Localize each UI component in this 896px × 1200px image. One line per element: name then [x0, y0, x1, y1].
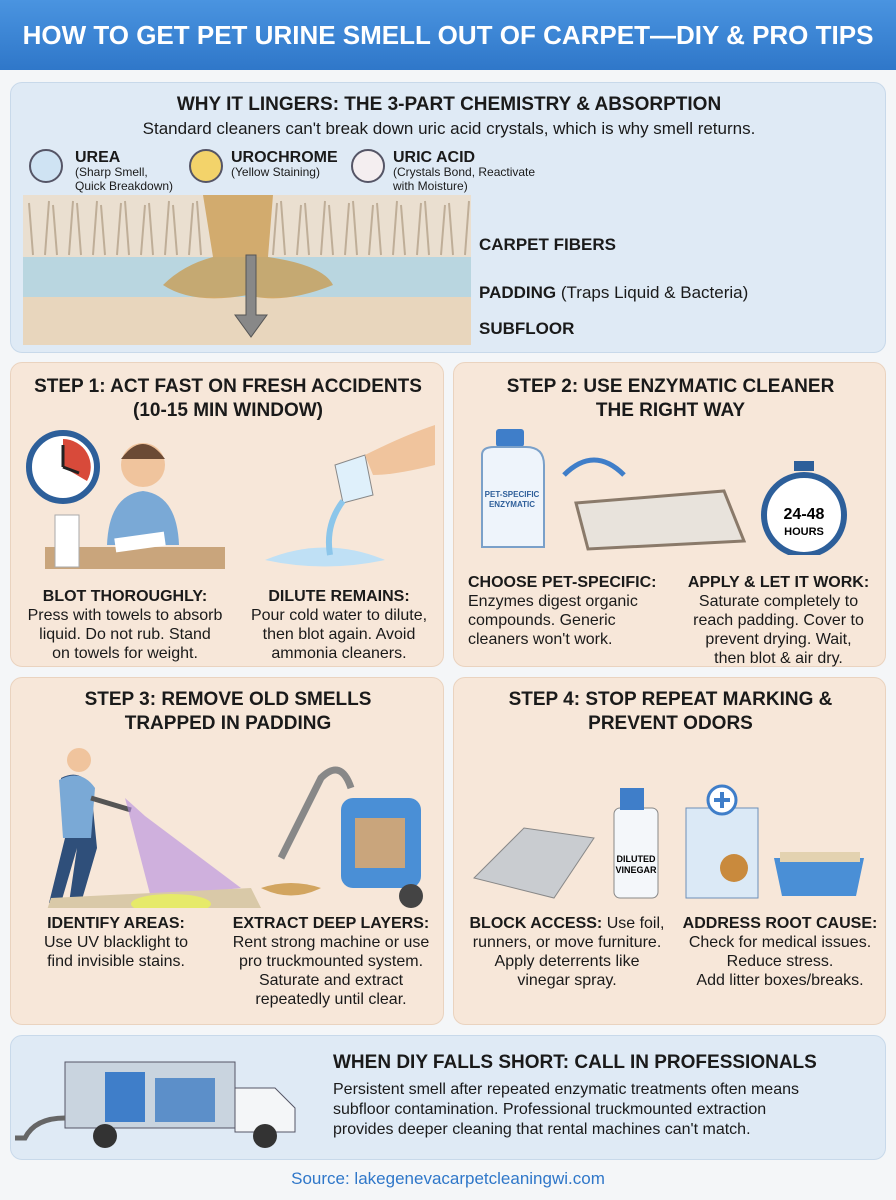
caption: dilute	[251, 588, 427, 662]
caption: blot	[28, 588, 222, 662]
caption: identify: find invisible stains.	[47, 953, 185, 970]
panel: step 3	[10, 677, 444, 1025]
panel: why it lingers: PADDING (Traps Liquid & Bacteria)	[479, 283, 748, 302]
caption: root cause: ADDRESS ROOT CAUSE:	[683, 915, 877, 932]
heading: STEP 2: USE ENZYMATIC CLEANER	[507, 376, 834, 397]
body text: subfloor contamination. Professional truckmounted extraction	[333, 1101, 766, 1118]
caption: apply: reach padding. Cover to	[693, 612, 864, 629]
caption: apply	[688, 574, 869, 667]
chemistry labels: UROCHROME	[231, 149, 338, 166]
illustration: foil, spray, vet, litter	[473, 784, 864, 899]
caption: apply: Saturate completely to	[699, 593, 858, 610]
caption: root cause: Check for medical issues.	[689, 934, 871, 951]
panel: why it lingers	[10, 82, 886, 353]
panel: step 2	[453, 362, 886, 667]
caption: root cause: Add litter boxes/breaks.	[696, 972, 864, 989]
caption: choose: cleaners won't work.	[468, 631, 612, 648]
illustration: foil, spray, vet, litter: DILUTED	[616, 854, 656, 864]
heading: STEP 4: STOP REPEAT MARKING &	[509, 689, 832, 710]
caption: block: Apply deterrents like	[495, 953, 639, 970]
chemistry labels: (Yellow Staining)	[231, 165, 320, 179]
illustration: bottle, mat, timer: 24-48	[784, 506, 825, 523]
heading	[509, 689, 832, 734]
caption: extract	[233, 915, 429, 1008]
chemistry labels: (Crystals Bond, Reactivate	[393, 165, 535, 179]
illustration: bottle, mat, timer	[481, 429, 847, 555]
caption: identify: Use UV blacklight to	[44, 934, 188, 951]
chemistry labels: with Moisture)	[393, 179, 468, 193]
caption: dilute: DILUTE REMAINS:	[268, 588, 410, 605]
caption: apply: prevent drying. Wait,	[705, 631, 852, 648]
heading: TRAPPED IN PADDING	[125, 713, 331, 734]
caption: block	[470, 915, 664, 989]
chemistry labels	[29, 149, 535, 193]
caption: blot: Press with towels to absorb	[28, 607, 222, 624]
caption: extract: EXTRACT DEEP LAYERS:	[233, 915, 429, 932]
caption: block: runners, or move furniture.	[473, 934, 661, 951]
panel: step 1	[10, 362, 444, 667]
heading: WHY IT LINGERS: THE 3-PART CHEMISTRY & ABSORPTION	[177, 94, 721, 115]
heading: THE RIGHT WAY	[596, 400, 745, 421]
carpet cross-section	[23, 195, 471, 345]
caption: block: BLOCK ACCESS: Use foil,	[470, 915, 664, 932]
caption: blot: on towels for weight.	[52, 645, 198, 662]
caption: dilute: ammonia cleaners.	[271, 645, 407, 662]
heading: (10-15 MIN WINDOW)	[133, 400, 323, 421]
title bar: HOW TO GET PET URINE SMELL OUT OF CARPET—DIY & PRO TIPS	[23, 20, 873, 50]
icon: truck	[15, 1062, 296, 1148]
heading	[85, 689, 371, 734]
layer labels: CARPET FIBERS	[479, 235, 616, 254]
source: Source: lakegenevacarpetcleaningwi.com	[291, 1169, 605, 1188]
chemistry labels: Quick Breakdown)	[75, 179, 173, 193]
caption: choose: Enzymes digest organic	[468, 593, 638, 610]
caption: apply: then blot & air dry.	[714, 650, 843, 667]
title bar	[0, 0, 896, 70]
chemistry labels: URIC ACID	[393, 149, 475, 166]
chemistry labels: (Sharp Smell,	[75, 165, 148, 179]
illustration: UV light and extractor	[48, 748, 423, 908]
caption: choose: compounds. Generic	[468, 612, 616, 629]
caption: extract: repeatedly until clear.	[255, 991, 407, 1008]
panel: step 4	[453, 677, 886, 1025]
caption: choose	[468, 574, 656, 648]
heading: STEP 1: ACT FAST ON FRESH ACCIDENTS	[34, 376, 422, 397]
body text: Persistent smell after repeated enzymatic treatments often means	[333, 1081, 799, 1098]
caption: apply: APPLY & LET IT WORK:	[688, 574, 869, 591]
heading: WHEN DIY FALLS SHORT: CALL IN PROFESSIONALS	[333, 1052, 817, 1073]
caption: extract: Saturate and extract	[259, 972, 403, 989]
caption: root cause	[683, 915, 877, 989]
subtitle: Standard cleaners can't break down uric acid crystals, which is why smell returns.	[143, 119, 755, 138]
chemistry labels: UREA	[75, 149, 120, 166]
illustration: bottle, mat, timer: PET-SPECIFIC	[485, 490, 540, 499]
body text: provides deeper cleaning that rental machines can't match.	[333, 1121, 751, 1138]
heading: STEP 3: REMOVE OLD SMELLS	[85, 689, 371, 710]
caption: identify	[44, 915, 188, 970]
heading: PREVENT ODORS	[588, 713, 753, 734]
caption: extract: Rent strong machine or use	[233, 934, 429, 951]
heading	[34, 376, 422, 421]
caption: choose: CHOOSE PET-SPECIFIC:	[468, 574, 656, 591]
caption: dilute: Pour cold water to dilute,	[251, 607, 427, 624]
caption: dilute: then blot again. Avoid	[263, 626, 415, 643]
caption: root cause: Reduce stress.	[727, 953, 833, 970]
illustration: foil, spray, vet, litter: VINEGAR	[615, 865, 657, 875]
caption: extract: pro truckmounted system.	[239, 953, 423, 970]
heading	[507, 376, 834, 421]
panel: professionals	[10, 1035, 886, 1160]
panel: why it lingers: SUBFLOOR	[479, 319, 574, 338]
caption: identify: IDENTIFY AREAS:	[47, 915, 185, 932]
caption: blot: BLOT THOROUGHLY:	[43, 588, 207, 605]
illustration: clock and person blotting	[26, 425, 435, 569]
caption: block: vinegar spray.	[517, 972, 617, 989]
illustration: bottle, mat, timer: ENZYMATIC	[489, 500, 535, 509]
illustration: bottle, mat, timer: HOURS	[784, 526, 824, 538]
caption: blot: liquid. Do not rub. Stand	[39, 626, 211, 643]
body text	[333, 1081, 799, 1138]
